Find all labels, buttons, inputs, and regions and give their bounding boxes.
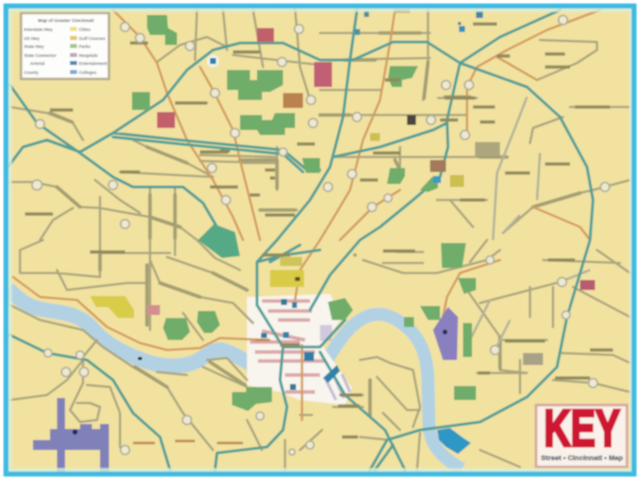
legend: right column: Parks xyxy=(79,44,91,49)
legend: right column: Cities xyxy=(79,27,91,32)
road network: pale creek roads xyxy=(470,97,590,350)
river: Ohio and Little Miami xyxy=(8,289,462,469)
legend: right column xyxy=(79,27,108,75)
legend: right column: Hospitals xyxy=(79,53,99,58)
legend: right column: Colleges xyxy=(79,70,97,75)
panel: downtown district xyxy=(247,294,352,405)
legend: left column: US Hwy xyxy=(24,36,40,41)
logo: KEY map publisher xyxy=(536,400,627,467)
parks: green areas xyxy=(132,15,476,411)
legend: left column xyxy=(24,27,57,75)
legend: left column: State Hwy xyxy=(24,44,45,49)
legend: left column: Arterial xyxy=(30,61,45,66)
legend: right column: Golf Courses xyxy=(79,36,106,41)
logo tagline: Street • Cincinnati • Map xyxy=(541,455,623,462)
airport: Lunken xyxy=(433,307,458,360)
legend: right column: Entertainment xyxy=(79,61,108,66)
water feature: Coney Island lake xyxy=(437,428,471,454)
legend: left column: State Connector xyxy=(24,53,57,58)
legend: symbols xyxy=(70,27,77,74)
legend: left column: Interstate Hwy xyxy=(24,27,53,32)
orange place labels xyxy=(133,340,270,443)
road network: thick divided arterials xyxy=(50,5,580,415)
panel: map legend xyxy=(21,13,109,79)
landmarks: universities and hospitals xyxy=(90,28,595,365)
airport: Greater Cincinnati runways xyxy=(33,398,109,472)
road network: orange US highways xyxy=(13,10,600,420)
legend title: Map of Greater Cincinnati xyxy=(38,18,94,23)
legend: left column: County xyxy=(24,70,39,75)
markers: attractions xyxy=(72,11,483,435)
